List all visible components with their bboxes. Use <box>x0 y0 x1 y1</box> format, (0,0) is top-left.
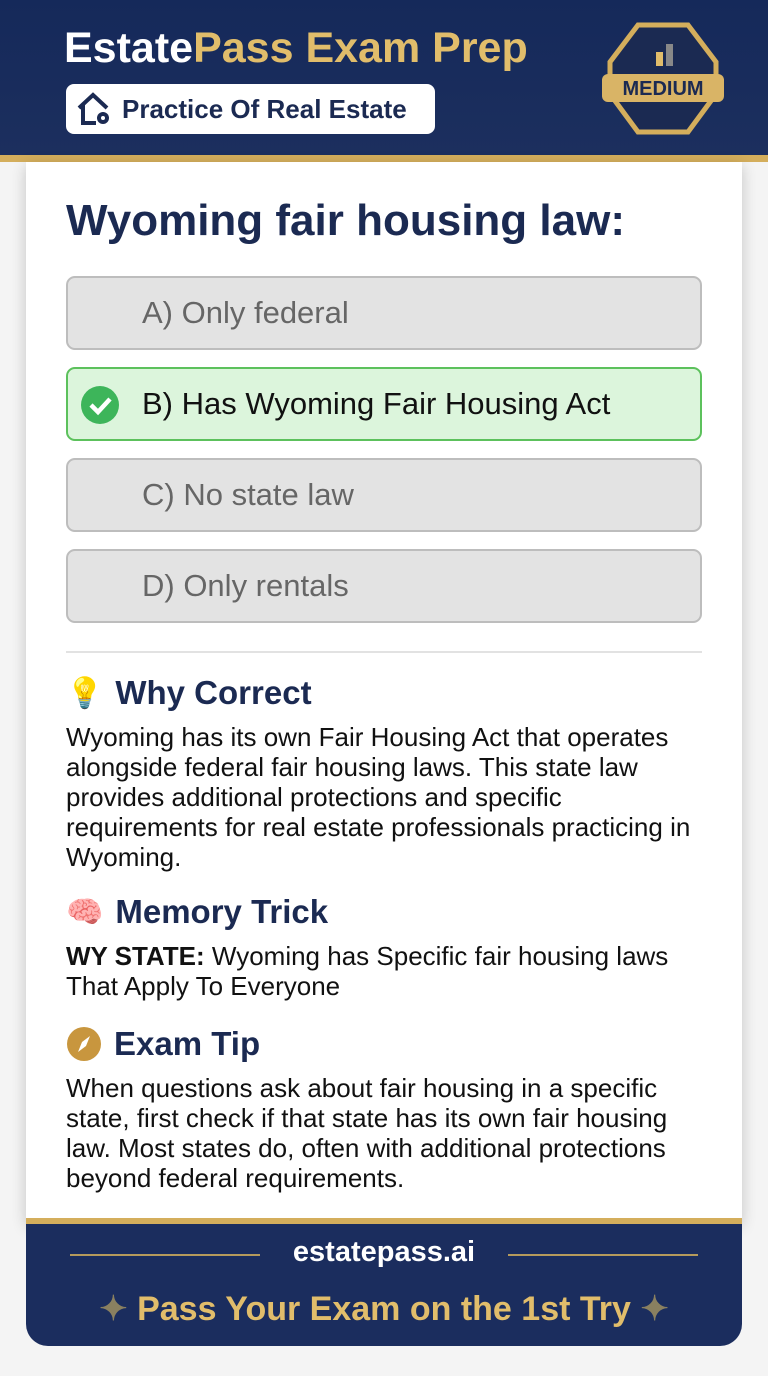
option D: D) Only rentals <box>142 568 349 603</box>
text: memory trick <box>66 941 668 1001</box>
icon: check <box>81 386 119 424</box>
text: why correct: alongside federal fair housing laws. This state law <box>66 752 638 782</box>
heading: exam tip: Exam Tip <box>114 1025 260 1062</box>
subject badge: Practice Of Real Estate <box>122 94 407 124</box>
header <box>0 0 768 162</box>
text: why correct: Wyoming. <box>66 842 181 872</box>
text: memory trick: WY STATE: Wyoming has Specific fair housing laws <box>66 941 668 971</box>
icon: house gear <box>78 92 109 125</box>
text: exam tip: law. Most states do, often with additional protections <box>66 1133 666 1163</box>
card <box>26 162 742 1222</box>
option C <box>66 458 702 532</box>
title: EstatePass Exam Prep <box>64 24 528 72</box>
option D <box>66 549 702 623</box>
footer url: estatepass.ai <box>293 1236 475 1268</box>
text: why correct: requirements for real estate professionals practicing in <box>66 812 690 842</box>
footer tagline: ✦ Pass Your Exam on the 1st Try ✦ <box>99 1290 669 1328</box>
heading: why correct: 💡 <box>66 676 103 710</box>
option A <box>66 276 702 350</box>
heading: memory trick: 🧠 <box>66 896 103 928</box>
option B correct <box>66 367 702 441</box>
difficulty badge <box>602 22 724 134</box>
text: why correct: Wyoming has its own Fair Housing Act that operates <box>66 722 668 752</box>
option B correct: B) Has Wyoming Fair Housing Act <box>142 386 610 421</box>
text: exam tip: beyond federal requirements. <box>66 1163 404 1193</box>
heading: memory trick: Memory Trick <box>115 893 328 930</box>
text: why correct: provides additional protections and specific <box>66 782 562 812</box>
footer <box>26 1218 742 1346</box>
text: exam tip <box>66 1073 667 1193</box>
text: why correct <box>66 722 690 872</box>
option C: C) No state law <box>142 477 354 512</box>
text: memory trick: That Apply To Everyone <box>66 971 340 1001</box>
difficulty badge: MEDIUM <box>622 78 704 100</box>
option A: A) Only federal <box>142 295 349 330</box>
text: exam tip: When questions ask about fair housing in a specific <box>66 1073 657 1103</box>
subject badge <box>66 84 435 134</box>
question: Wyoming fair housing law: <box>66 196 625 245</box>
heading: why correct: Why Correct <box>115 674 312 711</box>
text: exam tip: state, first check if that state has its own fair housing <box>66 1103 667 1133</box>
